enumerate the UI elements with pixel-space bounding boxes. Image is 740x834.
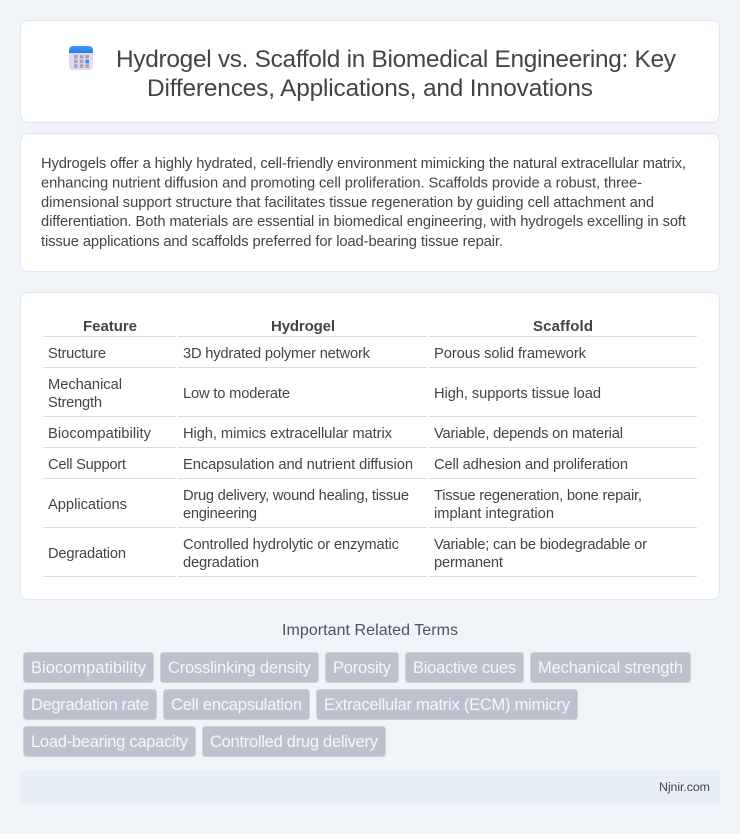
- table header: [43, 318, 697, 337]
- text block: summary: dimensional support structure that facilitates tissue regeneration by guiding cell attachment and: [41, 195, 654, 211]
- icon: calendar grid: [69, 46, 93, 70]
- text block: summary: differentiation. Both materials are essential in biomedical engineering, with hydrogels excelling in soft: [41, 214, 686, 230]
- table row: applications: Applications: [48, 497, 127, 513]
- tag: degradation rate: [24, 690, 156, 720]
- table row: cell support: Encapsulation and nutrient diffusion: [183, 457, 413, 473]
- heading: related terms: Important Related Terms: [282, 622, 458, 639]
- table row: applications: [43, 488, 697, 528]
- tag: bioactive cues: Bioactive cues: [413, 659, 516, 677]
- footer: [20, 770, 720, 804]
- title: Hydrogel vs. Scaffold in Biomedical Engineering: Key: [116, 46, 677, 73]
- table row: mechanical strength: Strength: [48, 395, 102, 411]
- tag: controlled drug delivery: [202, 726, 386, 756]
- table row: applications: implant integration: [434, 506, 554, 522]
- title: Differences, Applications, and Innovations: [147, 75, 593, 102]
- table row: degradation: Controlled hydrolytic or enzymatic: [183, 537, 399, 553]
- tag: cell encapsulation: [164, 690, 310, 720]
- tag: porosity: Porosity: [333, 659, 392, 677]
- panel: comparison table: [20, 292, 720, 600]
- tag list: related terms: [24, 652, 690, 756]
- table row: degradation: degradation: [183, 555, 259, 571]
- table header: Feature: [83, 318, 137, 335]
- table row: mechanical strength: [43, 377, 697, 417]
- tag: crosslinking density: [160, 652, 318, 682]
- footer: Njnir.com: [659, 780, 710, 794]
- table row: applications: engineering: [183, 506, 257, 522]
- table row: mechanical strength: High, supports tissue load: [434, 386, 601, 402]
- tag: mechanical strength: Mechanical strength: [538, 659, 683, 677]
- tag: ECM mimicry: [316, 690, 578, 720]
- tag: biocompatibility: [24, 652, 154, 682]
- table row: mechanical strength: Mechanical: [48, 377, 122, 393]
- tag: bioactive cues: [406, 652, 524, 682]
- table header: Hydrogel: [271, 318, 335, 335]
- table row: degradation: [43, 537, 697, 577]
- table row: structure: Porous solid framework: [434, 346, 587, 362]
- tag: ECM mimicry: Extracellular matrix (ECM) mimicry: [324, 696, 571, 714]
- table row: biocompatibility: Biocompatibility: [48, 426, 152, 442]
- tag: controlled drug delivery: Controlled drug delivery: [210, 733, 379, 751]
- table row: cell support: [43, 457, 697, 479]
- tag: cell encapsulation: Cell encapsulation: [171, 696, 302, 714]
- tag: load-bearing capacity: Load-bearing capacity: [31, 733, 189, 751]
- table row: mechanical strength: Low to moderate: [183, 386, 290, 402]
- table row: biocompatibility: High, mimics extracellular matrix: [183, 426, 393, 442]
- table row: degradation: Variable; can be biodegradable or: [434, 537, 647, 553]
- table row: applications: Tissue regeneration, bone repair,: [434, 488, 642, 504]
- text block: summary: [41, 156, 686, 250]
- text block: summary: Hydrogels offer a highly hydrated, cell-friendly environment mimicking the natural extracellular matrix,: [41, 156, 686, 172]
- table row: structure: 3D hydrated polymer network: [183, 346, 371, 362]
- panel: title header: [20, 20, 720, 122]
- tag: porosity: [326, 652, 398, 682]
- table row: structure: Structure: [48, 346, 106, 362]
- tag: mechanical strength: [530, 652, 690, 682]
- table row: cell support: Cell Support: [48, 457, 126, 473]
- table row: structure: [43, 346, 697, 368]
- tag: degradation rate: Degradation rate: [31, 696, 149, 714]
- table row: cell support: Cell adhesion and proliferation: [434, 457, 628, 473]
- text block: summary: tissue applications and scaffolds preferred for load-bearing tissue repair.: [41, 234, 503, 250]
- table row: degradation: Degradation: [48, 546, 126, 562]
- tag: load-bearing capacity: [24, 726, 196, 756]
- tag: biocompatibility: Biocompatibility: [31, 659, 147, 677]
- table row: applications: Drug delivery, wound healing, tissue: [183, 488, 409, 504]
- title: [116, 46, 677, 102]
- table row: biocompatibility: Variable, depends on material: [434, 426, 623, 442]
- text block: summary: enhancing nutrient diffusion and promoting cell proliferation. Scaffolds provide a robust, three-: [41, 176, 642, 192]
- table row: biocompatibility: [43, 426, 697, 448]
- table row: degradation: permanent: [434, 555, 503, 571]
- panel: summary paragraph: [20, 134, 720, 272]
- table header: Scaffold: [533, 318, 593, 335]
- tag: crosslinking density: Crosslinking density: [168, 659, 312, 677]
